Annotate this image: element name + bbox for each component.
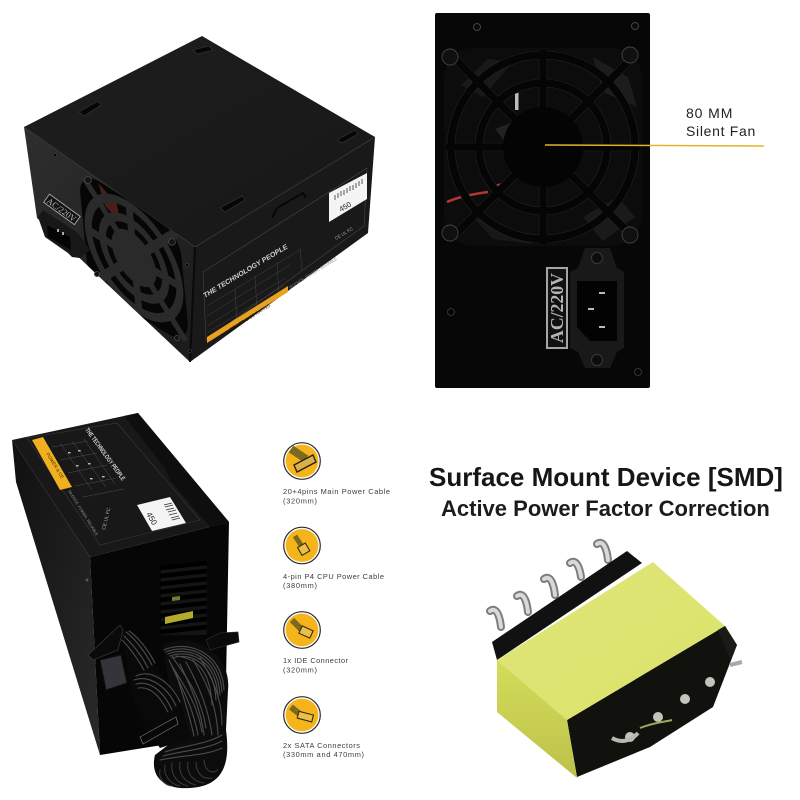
connector: 20+4 pin	[88, 625, 123, 660]
cable item: CPU power	[283, 527, 384, 590]
spec label top	[27, 423, 200, 545]
cable list	[283, 443, 390, 759]
callout: 80 MM Silent Fan	[545, 105, 764, 146]
cable item: IDE: 1x IDE Connector	[283, 656, 349, 665]
callout: 80 MM Silent Fan: Silent Fan	[686, 123, 756, 139]
cable item: SATA: (330mm and 470mm)	[283, 750, 364, 759]
cable item: SATA	[283, 697, 364, 759]
photo: PSU rear panel	[435, 13, 650, 388]
spec label top: POWER & CE	[45, 452, 65, 479]
cable item: main power: 20+4pins Main Power Cable	[283, 487, 390, 496]
AC/220V badge angled: AC/220V	[45, 196, 79, 224]
cable item: CPU power: (380mm)	[283, 581, 317, 590]
spec label angled: CE UL FC	[334, 226, 355, 241]
white blade highlight	[515, 93, 518, 110]
power inlet angled	[38, 210, 90, 258]
spec label angled	[202, 168, 367, 343]
photo: SMD transformer	[490, 543, 742, 778]
top face mounting clips	[79, 46, 358, 212]
vent slats	[160, 563, 207, 635]
transformer pins	[490, 543, 608, 627]
subheading: Active Power Factor Correction: Active Power Factor Correction	[441, 496, 770, 521]
spec label angled: THE TECHNOLOGY PEOPLE	[202, 244, 289, 300]
AC/220V badge rear: AC/220V	[547, 273, 567, 343]
fan grille rear	[442, 47, 642, 246]
spec label top: THE TECHNOLOGY PEOPLE	[83, 427, 126, 483]
red fan wires	[447, 192, 488, 202]
connector: 4-pin	[100, 655, 127, 690]
cable item: SATA: 2x SATA Connectors	[283, 741, 360, 750]
cable item: main power: (320mm)	[283, 496, 317, 506]
transformer solder points	[625, 677, 715, 742]
cable item: IDE	[283, 612, 349, 674]
spec label top: SILENCE. POWER. RELIABLE	[67, 489, 99, 537]
fan screws angled	[85, 177, 180, 341]
connector: SATA	[140, 717, 178, 744]
photo: PSU with cables	[12, 413, 239, 788]
spec label angled: SILENCE. POWER. RELIABLE	[288, 256, 338, 290]
fan grille angled	[80, 178, 188, 342]
cable item: CPU power: 4-pin P4 CPU Power Cable	[283, 572, 384, 581]
callout: 80 MM Silent Fan: 80 MM	[686, 105, 733, 121]
cable item: main power	[283, 443, 390, 506]
cable item: IDE: (320mm)	[283, 666, 317, 674]
spec label top: 450	[144, 510, 159, 527]
spec label top: CE UL FC	[101, 507, 113, 530]
connector: P4	[206, 632, 239, 650]
cable bundle	[122, 631, 228, 788]
photo: PSU angled view with fan	[24, 36, 375, 362]
spec label angled: POWER & CE RATING	[229, 303, 272, 332]
power inlet rear	[570, 248, 624, 368]
heading: Surface Mount Device: Surface Mount Device [SMD]	[429, 462, 783, 492]
spec label angled: 450	[338, 200, 353, 214]
